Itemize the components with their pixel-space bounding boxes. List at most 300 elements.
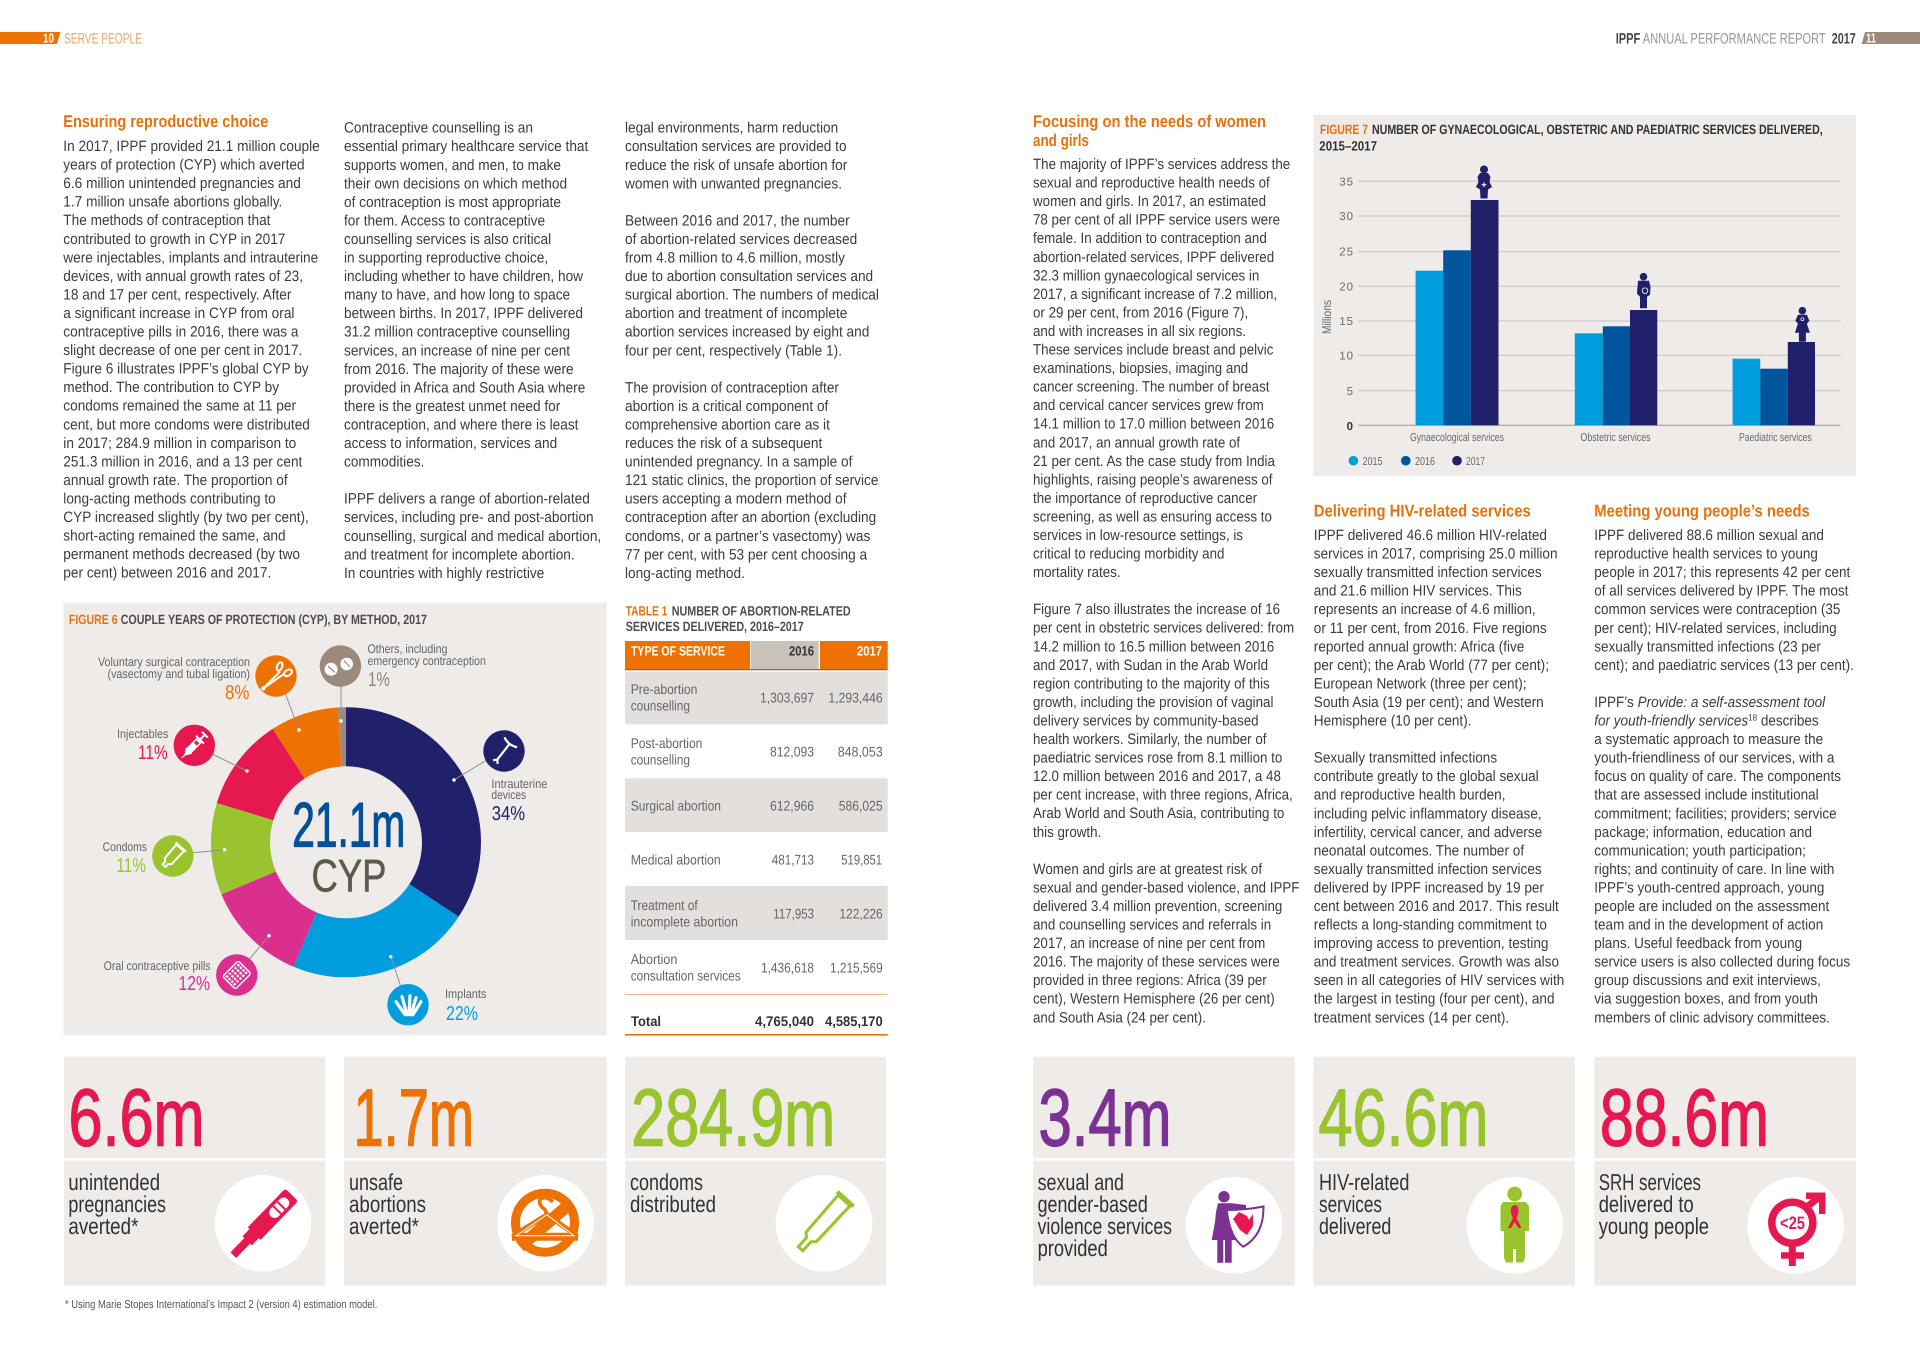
text block: column 5: infertility, cervical cancer, and adverse	[1314, 824, 1542, 841]
text block: column 4: and South Asia (24 per cent).	[1033, 1009, 1206, 1026]
stat card: 3.4m gender-based violence services: violence services	[1038, 1213, 1172, 1239]
text block: column 5: or 11 per cent, from 2016. Five regions	[1314, 620, 1547, 637]
text block: column 4: the importance of reproductive cancer	[1033, 490, 1257, 507]
stat card: 46.6m HIV-related services: 46.6m	[1318, 1074, 1488, 1164]
text block: column 3: consultation services are provided to	[625, 138, 847, 155]
text block: column 4: 12.0 million between 2016 and 2017, a 48	[1033, 768, 1281, 785]
stat card: 3.4m gender-based violence services: gender-based	[1038, 1191, 1148, 1217]
text block: column 3: 77 per cent, with 53 per cent choosing a	[625, 546, 868, 563]
row: total: 4,585,170	[825, 1013, 883, 1029]
label: intrauterine devices: 34%	[492, 803, 525, 825]
label: condoms	[103, 840, 147, 877]
text block: column 5: sexually transmitted infection services	[1314, 564, 1542, 581]
stat card: 88.6m SRH services to young people	[1594, 1057, 1856, 1286]
text block: column 1: cent, but more condoms were distributed	[63, 416, 310, 433]
text block: column 3: contraception after an abortion (excluding	[625, 509, 876, 526]
row: abortion consultation services	[631, 951, 883, 984]
text block: column 5: European Network (three per cent);	[1314, 675, 1527, 692]
stat card: 1.7m unsafe abortions: unsafe	[349, 1169, 403, 1195]
text block: column 4: growth, including the provision of vaginal	[1033, 694, 1273, 711]
text block: column 4: and with increases in all six regions.	[1033, 323, 1246, 340]
leader lines	[190, 680, 490, 990]
text block: column 4: These services include breast and pelvic	[1033, 342, 1274, 359]
text block: column 4: per cent in obstetric services delivered: from	[1033, 620, 1294, 637]
text block: column 4: Women and girls are at greatest risk of	[1033, 861, 1263, 878]
text block: column 4: this growth.	[1033, 824, 1101, 841]
table title	[626, 604, 851, 634]
text block: column 1: were injectables, implants and intrauterine	[62, 249, 318, 266]
footnote: * Using Marie Stopes International’s Impact 2 (version 4) estimation model.	[65, 1299, 377, 1311]
text block: column 2: commodities.	[344, 454, 424, 471]
text block: column 4: provided in three regions: Africa (39 per	[1033, 972, 1267, 989]
stat card: 46.6m HIV-related services: HIV-related	[1319, 1169, 1409, 1195]
heading: Focusing on the needs of women and girls	[1033, 112, 1266, 150]
stat card: 284.9m condoms: condoms	[630, 1169, 703, 1195]
text block: column 1: in 2017; 284.9 million in comparison to	[63, 435, 296, 452]
heading: Meeting young people's needs: Meeting young people’s needs	[1594, 502, 1810, 520]
y axis labels: 15	[1339, 316, 1354, 328]
text block: column 6: focus on quality of care. The components	[1594, 768, 1841, 785]
text block: column 5: seen in all categories of HIV services with	[1314, 972, 1564, 989]
stat card: 284.9m condoms	[625, 1057, 886, 1286]
row: post-abortion counselling	[631, 735, 883, 768]
text block: column 6: sexually transmitted infections (23 per	[1594, 638, 1821, 655]
text block: column 6: package; information, education and	[1594, 824, 1812, 841]
row: treatment of incomplete abortion: incomplete abortion	[631, 914, 738, 930]
label: injectables: 11%	[138, 742, 168, 764]
text block: column 2: essential primary healthcare service that	[344, 138, 589, 155]
stat card: 88.6m SRH services to young people: delivered to	[1599, 1191, 1694, 1217]
text block: column 3: unintended pregnancy. In a sample of	[625, 454, 853, 471]
text block: column 3: due to abortion consultation services and	[625, 268, 873, 285]
row: post-abortion counselling: Post-abortion	[631, 735, 702, 751]
text block: column 6: IPPF’s youth-centred approach, young	[1594, 879, 1824, 896]
text block: column 2: between births. In 2017, IPPF delivered	[344, 305, 583, 322]
stat card: 88.6m SRH services to young people: 88.6m	[1600, 1074, 1769, 1164]
label: oral contraceptive pills: Oral contraceptive pills	[104, 959, 211, 973]
text block: column 1: slight decrease of one per cent in 2017.	[63, 342, 302, 359]
text block: column 4: 2017, a significant increase of 7.2 million,	[1033, 286, 1277, 303]
label: implants: Implants	[445, 987, 486, 1001]
icon: condom outline	[792, 1192, 854, 1256]
y axis labels: 5	[1347, 386, 1354, 398]
text block: column 4: and cervical cancer services grew from	[1033, 397, 1264, 414]
text block: column 5: cent between 2016 and 2017. This result	[1314, 898, 1560, 915]
table title: NUMBER OF ABORTION-RELATED	[672, 604, 851, 618]
text block: column 5: improving access to prevention, testing	[1314, 935, 1548, 952]
text block: column 2: services, including pre- and post-abortion	[344, 509, 594, 526]
label: surgical contraception: Voluntary surgical contraception	[98, 655, 250, 669]
row: total: 4,765,040	[755, 1013, 814, 1029]
text block: column 1: years of protection (CYP) which averted	[63, 157, 305, 174]
text block: column 1: CYP increased slightly (by two per cent),	[63, 509, 309, 526]
text block: column 6: rights; and continuity of care. In line with	[1594, 861, 1834, 878]
text block: column 4: per cent increase, with three regions, Africa,	[1033, 787, 1293, 804]
text block: column 4: 78 per cent of all IPPF service users were	[1033, 212, 1280, 229]
row: medical abortion: 519,851	[841, 852, 882, 868]
text block: column 2: Contraceptive counselling is an	[344, 120, 533, 137]
table 1: abortion-related services	[625, 604, 888, 1036]
stat card: 284.9m condoms: distributed	[630, 1191, 716, 1217]
y axis title: Millions	[1320, 300, 1334, 334]
text block: column 5: reported annual growth: Africa (five	[1314, 638, 1524, 655]
donut centre total: 21.1m	[292, 790, 405, 860]
row: post-abortion counselling: counselling	[631, 752, 690, 768]
stat card: 3.4m gender-based violence services: provided	[1038, 1235, 1108, 1261]
text block: column 5: per cent); the Arab World (77 per cent);	[1314, 657, 1549, 674]
row: total	[625, 1013, 888, 1036]
text block: column 4: delivered 3.4 million prevention, screening	[1033, 898, 1282, 915]
text block: column 2: counselling, surgical and medical abortion,	[344, 528, 601, 545]
icon: crossed-out hanger	[512, 1193, 578, 1252]
text block: column 3: The provision of contraception after	[625, 379, 839, 396]
text block: column 2: there is the greatest unmet need for	[344, 398, 560, 415]
row: surgical abortion: 586,025	[839, 798, 883, 814]
icon: pregnancy test	[227, 1189, 298, 1261]
text block: column 6: group discussions and exit interviews,	[1594, 972, 1821, 989]
label: oral contraceptive pills: 12%	[178, 973, 210, 995]
icon: midwife above obstetric bar	[1637, 273, 1650, 308]
text block: column 1: 251.3 million in 2016, and a 13 per cent	[63, 453, 303, 470]
heading: Focusing on the needs of women and girls: Focusing on the needs of women	[1033, 112, 1266, 131]
text block: column 3: women with unwanted pregnancies.	[624, 175, 842, 192]
y axis labels: 25	[1339, 246, 1354, 258]
label: intrauterine devices: Intrauterine	[491, 777, 547, 791]
text block: column 4: 14.1 million to 17.0 million between 2016	[1033, 416, 1274, 433]
stat card: 88.6m SRH services to young people: young people	[1599, 1213, 1709, 1239]
text block: column 2: counselling services is also critical	[344, 231, 551, 248]
figure 7 title	[1319, 122, 1823, 154]
text block: column 6: describes	[1757, 713, 1819, 730]
donut centre total: CYP	[312, 850, 386, 902]
text block: column 1: a significant increase in CYP from oral	[63, 305, 294, 322]
text block: column 1: long-acting methods contributing to	[63, 490, 276, 507]
legend: 2015	[1362, 456, 1382, 468]
text block: column 3: surgical abortion. The numbers of medical	[625, 287, 879, 304]
header left: page number and section: 10	[43, 30, 54, 46]
text block: column 4: examinations, biopsies, imaging and	[1033, 360, 1248, 377]
text block: column 2: In countries with highly restrictive	[344, 565, 544, 582]
text block: column 6: that are assessed include institutional	[1594, 787, 1819, 804]
text block: column 6: communication; youth participation;	[1594, 842, 1806, 859]
text block: column 4: or 29 per cent, from 2016 (Figure 7),	[1033, 304, 1248, 321]
icon: intrauterine device	[463, 710, 545, 792]
stat card: 88.6m SRH services to young people: SRH services	[1599, 1169, 1701, 1195]
y axis labels: 35	[1339, 176, 1354, 188]
bars: obstetric services	[1575, 310, 1657, 444]
text block: column 1: permanent methods decreased (by two	[63, 546, 300, 563]
icon: gender symbol with under 25	[1772, 1192, 1826, 1266]
text block: column 1: The methods of contraception that	[63, 212, 271, 229]
row: pre-abortion counselling	[631, 681, 883, 714]
text block: column 6: a systematic approach to measure the	[1594, 731, 1823, 748]
figure 6 title	[69, 612, 427, 627]
header right: report title and page number: 11	[1866, 30, 1876, 46]
text block: column 5: treatment services (14 per cent).	[1314, 1009, 1509, 1026]
text block: column 5: and 21.6 million HIV services. This	[1314, 583, 1522, 600]
text block: column 4: cancer screening. The number of breast	[1033, 379, 1270, 396]
text block: column 2: from 2016. The majority of these were	[344, 361, 574, 378]
stat card: 1.7m unsafe abortions: averted*	[349, 1213, 419, 1239]
text block: column 6: commitment; facilities; providers; service	[1594, 805, 1837, 822]
text block: column 6: common services were contraception (35	[1594, 601, 1840, 618]
label: intrauterine devices	[491, 777, 547, 825]
text block: column 5: Sexually transmitted infections	[1314, 750, 1497, 767]
text block: column 1: method. The contribution to CYP by	[63, 379, 280, 396]
text block: column 4: and counselling services and referrals in	[1033, 917, 1271, 934]
text block: column 1: contributed to growth in CYP in 2017	[63, 231, 285, 248]
label: others	[368, 642, 486, 691]
stat card: 3.4m gender-based violence services: sexual and	[1038, 1169, 1124, 1195]
row: surgical abortion: 612,966	[770, 798, 814, 814]
row: surgical abortion: Surgical abortion	[631, 798, 721, 814]
label: injectables: Injectables	[117, 727, 168, 741]
text block: column 1: annual growth rate. The proportion of	[63, 472, 288, 489]
row: treatment of incomplete abortion	[631, 897, 883, 930]
icon: nurse above paediatric bar	[1795, 307, 1810, 342]
donut centre total	[292, 790, 405, 902]
text block: column 6: via suggestion boxes, and from youth	[1594, 991, 1818, 1008]
y axis labels	[1339, 176, 1354, 433]
row: abortion consultation services: 1,436,618	[761, 960, 814, 976]
text block: column 6: members of clinic advisory committees.	[1594, 1009, 1830, 1026]
y axis labels: 0	[1347, 421, 1354, 433]
table row bands	[625, 672, 888, 940]
icon: woman with shield	[1212, 1191, 1264, 1263]
text block: column 1: 1.7 million unsafe abortions globally.	[63, 194, 282, 211]
stat card: 46.6m HIV-related services: services	[1319, 1191, 1382, 1217]
icon: implant rods (implants)	[387, 984, 429, 1025]
table header	[625, 641, 888, 670]
row: pre-abortion counselling: 1,303,697	[760, 690, 814, 706]
text block: column 5: IPPF delivered 46.6 million HIV-related	[1314, 527, 1547, 544]
bars: paediatric services: Paediatric services	[1739, 432, 1812, 444]
figure 6 title: FIGURE 6	[69, 612, 118, 627]
text block: column 6: youth-friendliness of our services, with a	[1594, 750, 1835, 767]
legend: 2017	[1466, 456, 1485, 468]
text block: column 2: their own decisions on which method	[344, 175, 567, 192]
row: abortion consultation services: Abortion	[631, 951, 677, 967]
text block: column 3: abortion is a critical component of	[625, 398, 829, 415]
text block: column 5: and reproductive health burden,	[1314, 787, 1506, 804]
legend: 2016	[1415, 456, 1435, 468]
text block: column 3: long-acting method.	[625, 565, 745, 582]
text block: column 2: contraception, and where there is least	[344, 416, 579, 433]
row: pre-abortion counselling: 1,293,446	[828, 690, 883, 706]
text block: column 4: critical to reducing morbidity and	[1033, 546, 1224, 563]
stat card: 1.7m unsafe abortions: abortions	[349, 1191, 426, 1217]
text block: column 6: people in 2017; this represents 42 per cent	[1594, 564, 1851, 581]
text block: column 4: services in low-resource settings, is	[1033, 527, 1243, 544]
icon: gender symbol with under 25: <25	[1780, 1213, 1805, 1233]
text block: column 3: reduces the risk of a subsequent	[625, 435, 823, 452]
text block: column 2: of contraception is most appropriate	[344, 194, 561, 211]
text block: column 4: abortion-related services, IPPF delivered	[1033, 249, 1274, 266]
text block: column 3: legal environments, harm reduction	[625, 120, 838, 137]
text block: column 4: delivery services by community-based	[1033, 712, 1259, 729]
icon: syringe (injectables)	[153, 704, 236, 787]
text block: column 5: South Asia (19 per cent); and Western	[1314, 694, 1544, 711]
text block: column 5: sexually transmitted infection services	[1314, 861, 1542, 878]
text block: column 3: users accepting a modern method of	[625, 491, 847, 508]
icon: pill pack (oral contraceptive pills)	[216, 954, 258, 996]
text block: column 1: condoms remained the same at 11 per	[63, 398, 296, 415]
text block: column 5: including pelvic inflammatory disease,	[1314, 805, 1542, 822]
text block: column 1: 18 and 17 per cent, respectively. After	[63, 286, 291, 303]
text block: column 4: highlights, raising people’s awareness of	[1033, 471, 1273, 488]
header right: report title and page number: IPPF ANNUAL PERFORMANCE REPORT	[1616, 30, 1826, 48]
text block: column 5: reflects a long-standing commitment to	[1314, 917, 1547, 934]
donut chart	[240, 737, 452, 948]
stat card: 1.7m unsafe abortions	[344, 1057, 607, 1286]
row: abortion consultation services: 1,215,569	[830, 960, 883, 976]
text block: column 6: per cent); HIV-related services, including	[1594, 620, 1837, 637]
y axis labels: 10	[1339, 350, 1354, 362]
text block: column 6: 18	[1748, 713, 1757, 723]
text block: column 6: plans. Useful feedback from young	[1594, 935, 1802, 952]
panel: figure 6 donut chart	[64, 602, 606, 1036]
bars: obstetric services: Obstetric services	[1580, 432, 1651, 444]
table title: TABLE 1	[626, 604, 668, 618]
row: surgical abortion	[631, 798, 883, 814]
text block: column 3: abortion and treatment of incomplete	[625, 305, 847, 322]
text block: column 4: The majority of IPPF’s services address the	[1033, 156, 1290, 173]
stat card: 6.6m unintended pregnancies	[64, 1057, 325, 1286]
icon: condom (condoms)	[132, 815, 214, 897]
text block: column 4: women and girls. In 2017, an estimated	[1032, 193, 1266, 210]
text block: column 4: and 2017, with Sudan in the Arab World	[1033, 657, 1268, 674]
text block: column 3: comprehensive abortion care as it	[625, 416, 831, 433]
text block: column 1: short-acting remained the same, and	[63, 528, 286, 545]
text block: column 2: provided in Africa and South Asia where	[344, 379, 585, 396]
label: injectables	[117, 727, 168, 764]
bars: gynaecological services	[1410, 200, 1504, 444]
text block: column 6: of all services delivered by IPPF. The most	[1594, 583, 1849, 600]
heading: Focusing on the needs of women and girls: and girls	[1033, 131, 1089, 150]
text block: column 4: 21 per cent. As the case study from India	[1033, 453, 1276, 470]
stat card: 6.6m unintended pregnancies: averted*	[68, 1213, 138, 1239]
text block: column 6: service users is also collected during focus	[1594, 954, 1850, 971]
text block: column 3: from 4.8 million to 4.6 million, mostly	[625, 250, 845, 267]
text block: column 3: condoms, or a partner’s vasectomy) was	[625, 528, 870, 545]
y axis labels: 30	[1339, 211, 1354, 223]
figure 7 title: 2015–2017	[1319, 138, 1377, 154]
text block: column 3: of abortion-related services decreased	[625, 231, 857, 248]
figure 7 title: FIGURE 7	[1320, 122, 1368, 137]
text block: column 4: 2017, an increase of nine per cent from	[1033, 935, 1265, 952]
row: abortion consultation services: consultation services	[631, 968, 741, 984]
table header: TYPE OF SERVICE	[631, 644, 725, 658]
text block: column 5: delivered by IPPF increased by 19 per	[1314, 879, 1544, 896]
icon: person with red ribbon	[1500, 1187, 1529, 1262]
text block: column 6: reproductive health services to young	[1594, 546, 1818, 563]
text block: column 4: paediatric services rose from 8.1 million to	[1033, 750, 1282, 767]
text block: column 5: the largest in testing (four per cent), and	[1314, 991, 1555, 1008]
y axis labels: 20	[1339, 282, 1354, 294]
heading: Ensuring reproductive choice: Ensuring reproductive choice	[63, 112, 268, 131]
row: treatment of incomplete abortion: 117,953	[773, 906, 814, 922]
text block: column 4: sexual and gender-based violence, and IPPF	[1033, 879, 1299, 896]
label: condoms: Condoms	[103, 840, 147, 854]
text block: column 4: female. In addition to contraception and	[1033, 230, 1267, 247]
label: others: emergency contraception	[368, 654, 486, 668]
row: post-abortion counselling: 848,053	[838, 744, 883, 760]
text block: column 5: Hemisphere (10 per cent).	[1314, 713, 1471, 730]
label: implants	[445, 987, 486, 1025]
row: pre-abortion counselling: counselling	[631, 698, 690, 714]
bars: gynaecological services: Gynaecological services	[1410, 432, 1504, 444]
text block: column 6: IPPF’s Provide: a self-assessment tool	[1594, 694, 1825, 711]
text block: column 4: mortality rates.	[1033, 564, 1121, 581]
row: medical abortion	[631, 852, 882, 868]
text block: column 5: and treatment services. Growth was also	[1314, 954, 1559, 971]
text block: column 3: Between 2016 and 2017, the number	[625, 212, 850, 229]
label: oral contraceptive pills	[104, 959, 211, 995]
stat card: 6.6m unintended pregnancies: pregnancies	[68, 1191, 166, 1217]
row: post-abortion counselling: 812,093	[770, 744, 814, 760]
text block: column 3: abortion services increased by eight and	[625, 324, 869, 341]
text block: column 1: per cent) between 2016 and 2017.	[63, 565, 271, 582]
text block: column 1: Figure 6 illustrates IPPF’s global CYP by	[63, 361, 309, 378]
stat card: 3.4m gender-based violence services: 3.4m	[1038, 1074, 1172, 1164]
text block: column 1: In 2017, IPPF provided 21.1 million couple	[63, 138, 320, 155]
figure 6 title: COUPLE YEARS OF PROTECTION (CYP), BY METHOD, 2017	[121, 612, 427, 627]
row: pre-abortion counselling: Pre-abortion	[631, 681, 697, 697]
header right: report title and page number: 2017	[1832, 30, 1856, 48]
row: treatment of incomplete abortion: 122,226	[839, 906, 883, 922]
text block: column 2: 31.2 million contraceptive counselling	[344, 324, 570, 341]
text block: column 5: contribute greatly to the global sexual	[1314, 768, 1539, 785]
stat card: 3.4m gender-based violence services	[1033, 1057, 1295, 1286]
text block: column 5: represents an increase of 4.6 million,	[1314, 601, 1536, 618]
text block: column 4: screening, as well as ensuring access to	[1033, 508, 1272, 525]
table header: 2017	[857, 644, 882, 658]
header left: page number and section: SERVE PEOPLE	[64, 30, 142, 48]
label: surgical contraception	[98, 655, 250, 704]
icon: pills (others)	[320, 645, 361, 687]
text block: column 4: and 2017, an annual growth rate of	[1033, 434, 1241, 451]
panel: figure 7 bar chart	[1314, 115, 1856, 476]
text block: column 2: in supporting reproductive choice,	[344, 250, 548, 267]
stat card: 284.9m condoms: 284.9m	[631, 1074, 835, 1164]
text block: column 4: Figure 7 also illustrates the increase of 16	[1033, 601, 1280, 618]
text block: column 1: 6.6 million unintended pregnancies and	[63, 175, 301, 192]
text block: column 4: sexual and reproductive health needs of	[1033, 175, 1270, 192]
text block: column 3: 121 static clinics, the proportion of service	[625, 472, 878, 489]
text block: column 2: supports women, and men, to make	[344, 157, 561, 174]
stat card: 46.6m HIV-related services: delivered	[1319, 1213, 1391, 1239]
text block: column 2: IPPF delivers a range of abortion-related	[344, 491, 590, 508]
legend	[1349, 456, 1485, 468]
table header: 2016	[789, 644, 814, 658]
text block: column 3: four per cent, respectively (Table 1).	[625, 342, 842, 359]
bars: paediatric services	[1733, 342, 1815, 444]
text block: column 4: cent), Western Hemisphere (26 per cent)	[1033, 991, 1275, 1008]
stat card: 6.6m unintended pregnancies: unintended	[68, 1169, 160, 1195]
text block: column 6: team and in the development of action	[1594, 917, 1823, 934]
text block: column 4: health workers. Similarly, the number of	[1033, 731, 1267, 748]
text block: column 4: 14.2 million to 16.5 million between 2016	[1033, 638, 1274, 655]
label: surgical contraception: 8%	[225, 682, 250, 704]
text block: column 4: 32.3 million gynaecological services in	[1033, 267, 1259, 284]
text block: column 2: including whether to have children, how	[344, 268, 583, 285]
text block: column 2: access to information, services and	[344, 435, 557, 452]
text block: column 1: devices, with annual growth rates of 23,	[63, 268, 303, 285]
table title: SERVICES DELIVERED, 2016–2017	[626, 619, 804, 634]
text block: column 2: many to have, and how long to space	[344, 287, 570, 304]
icon: forceps (surgical)	[255, 655, 297, 697]
text block: column 4: region contributing to the majority of this	[1033, 675, 1270, 692]
